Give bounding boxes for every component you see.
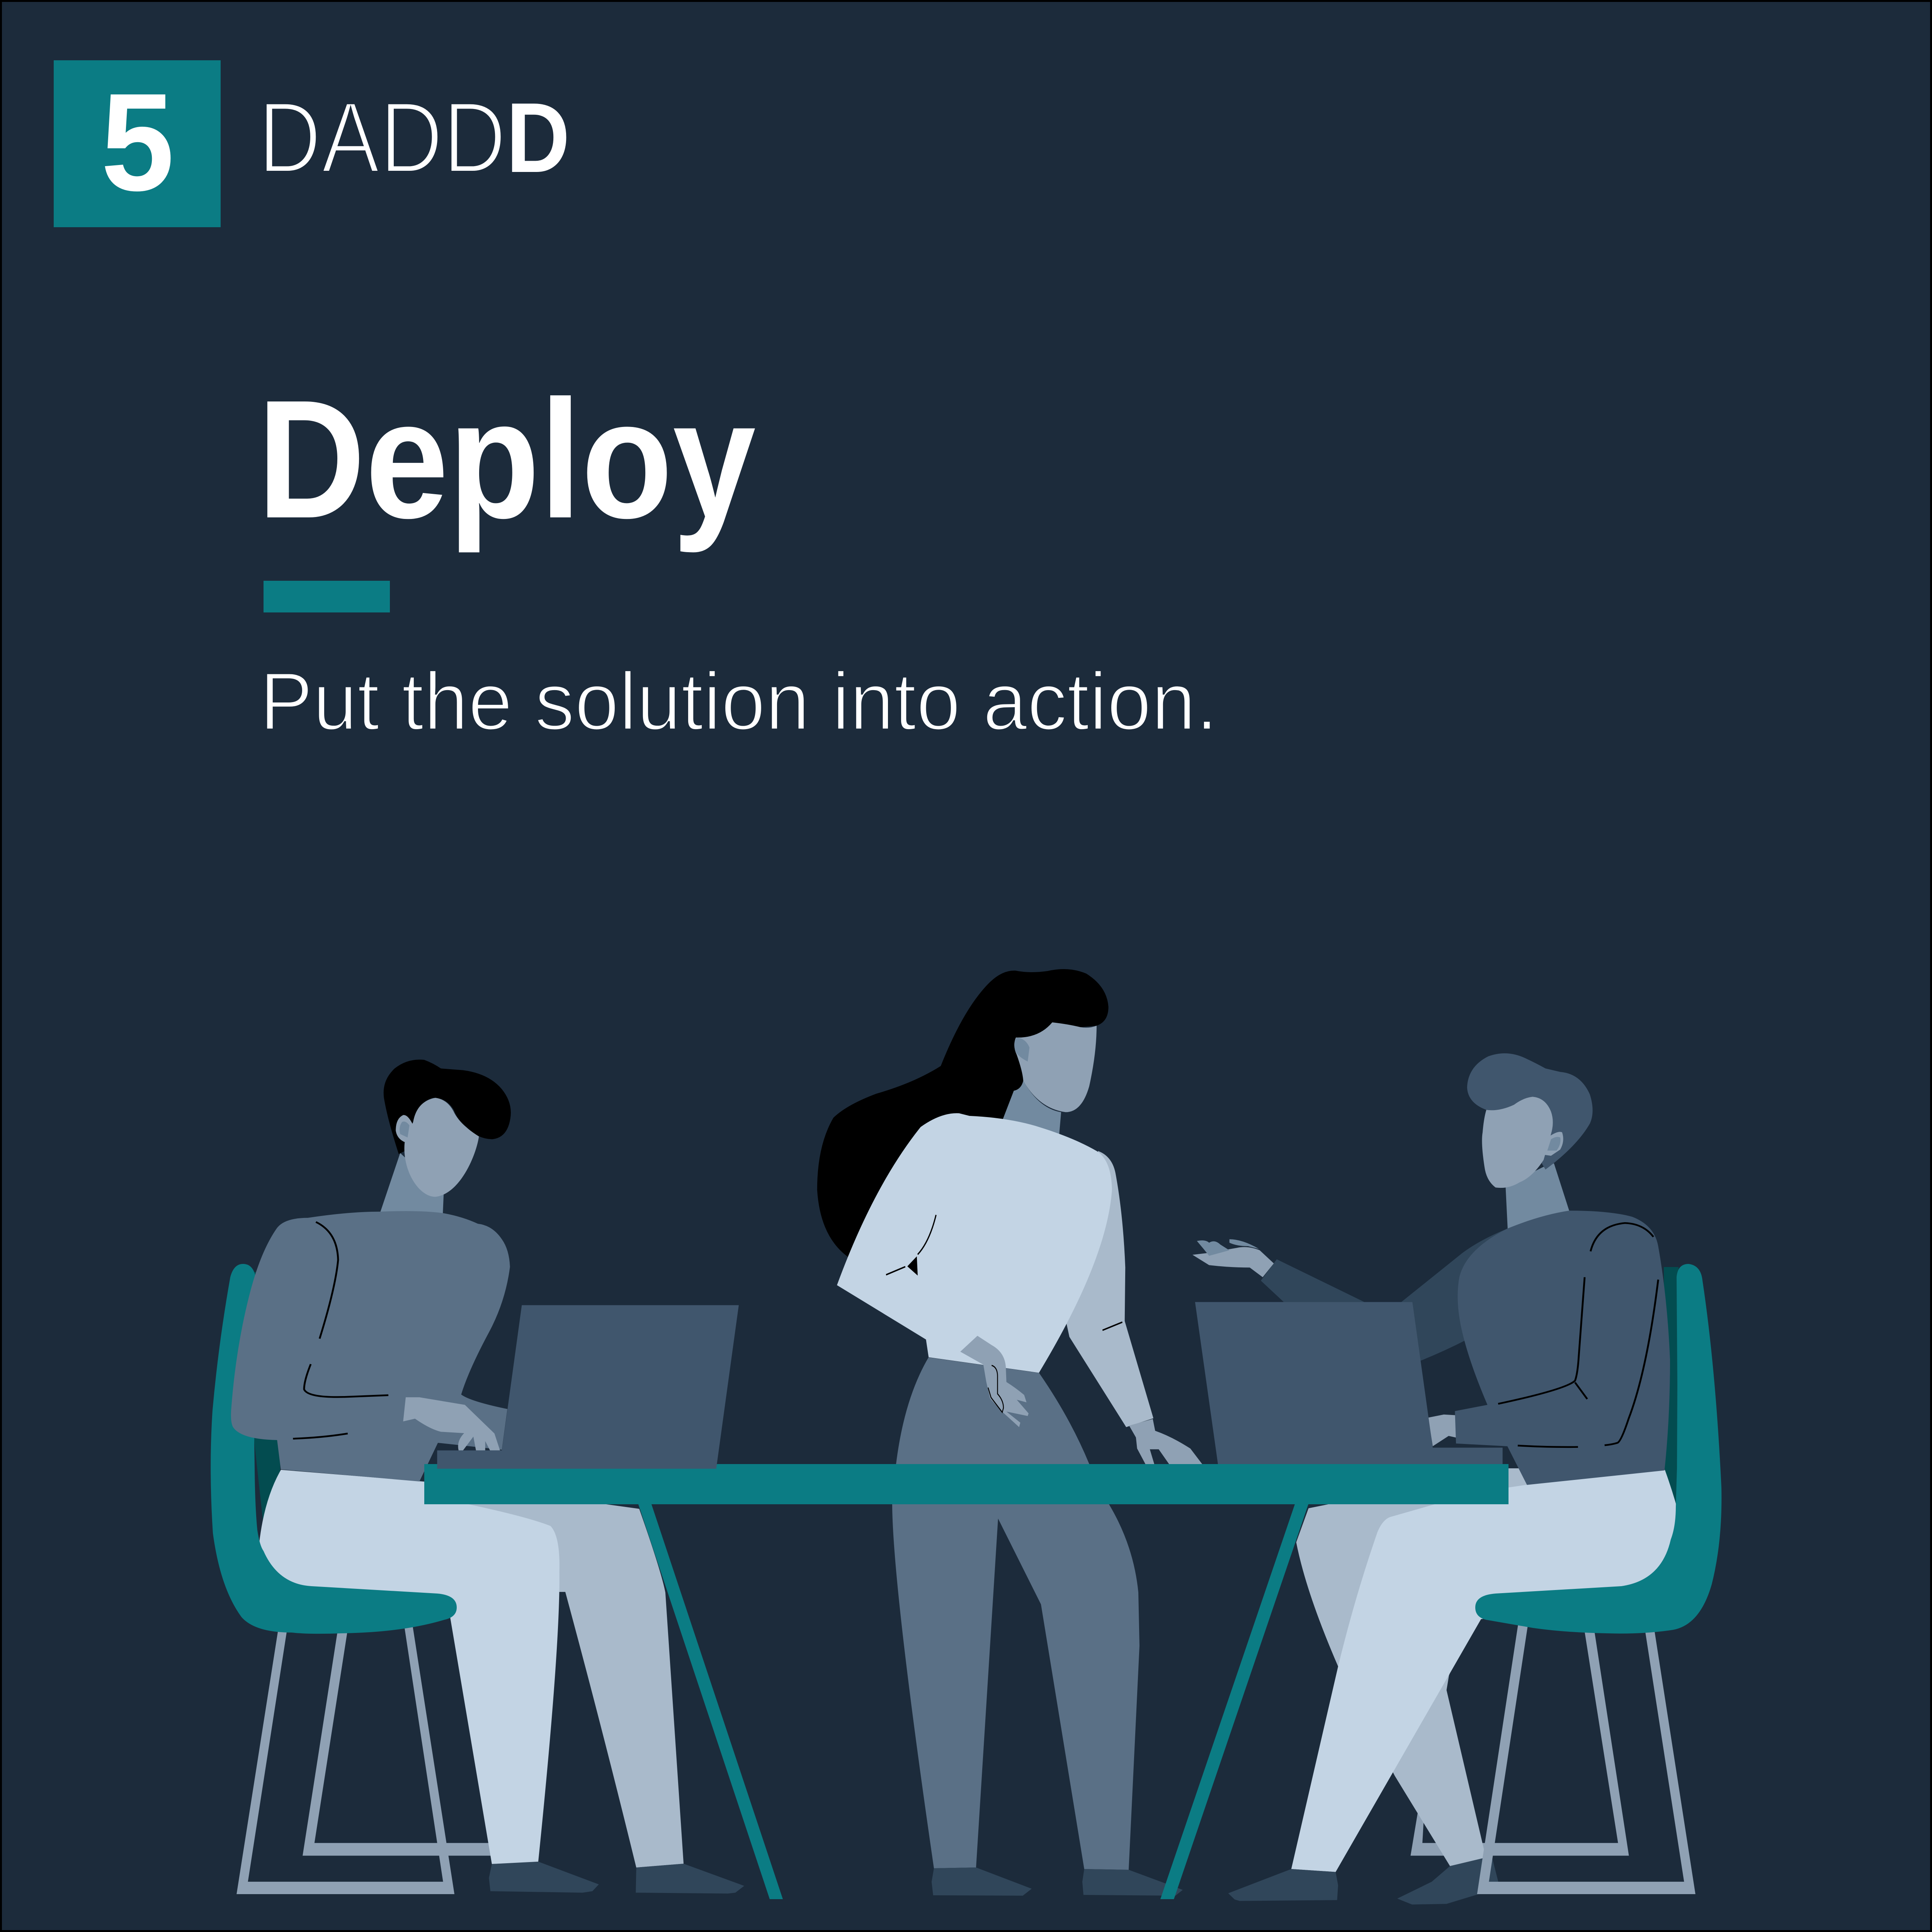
left chair frame [236, 1625, 509, 1894]
ear [396, 1115, 412, 1144]
right person back shoe [1397, 1858, 1498, 1905]
right person: upper body [1192, 1053, 1670, 1485]
hair [1467, 1053, 1593, 1170]
woman standing [817, 969, 1202, 1896]
far hand [1129, 1419, 1202, 1464]
hand on hip [960, 1336, 1029, 1427]
right person back leg [1296, 1468, 1528, 1866]
fingers [1197, 1239, 1259, 1256]
back leg [411, 1481, 684, 1867]
face [404, 1098, 479, 1197]
shirt creases [886, 1215, 1122, 1412]
right chair frame front [1477, 1625, 1696, 1894]
neck [380, 1153, 444, 1217]
accent bar [264, 581, 390, 612]
left chair dark inner back [254, 1272, 280, 1526]
right chair dark inner back [1664, 1267, 1679, 1507]
hair [817, 969, 1109, 1258]
shirt [837, 1113, 1112, 1373]
left person: upper body [231, 1060, 511, 1481]
brand name DADDD: D [506, 82, 570, 193]
right person: front leg [1228, 1470, 1690, 1901]
subtitle: Put the solution into action. [260, 655, 1218, 747]
ear [1014, 1037, 1029, 1061]
neck [1505, 1163, 1570, 1231]
left shoe [932, 1867, 1032, 1896]
front shoe [489, 1862, 599, 1893]
number badge: 5 [101, 65, 174, 220]
left person: legs [257, 1470, 744, 1894]
sleeve lines [293, 1222, 388, 1439]
hair [384, 1060, 511, 1154]
back arm [1261, 1228, 1509, 1361]
back shoe [636, 1864, 744, 1894]
ear [1544, 1132, 1563, 1156]
left laptop [437, 1305, 739, 1469]
front leg [257, 1470, 560, 1864]
torso and arm [1455, 1211, 1670, 1485]
table top [424, 1464, 1509, 1504]
trousers [892, 1357, 1139, 1870]
woman upper body [817, 969, 1202, 1464]
far arm [1066, 1151, 1153, 1427]
hand [403, 1397, 500, 1451]
torso and arm [231, 1211, 510, 1481]
right laptop [1195, 1302, 1503, 1467]
left chair shell [211, 1264, 457, 1634]
number badge [54, 60, 221, 227]
right chair frame back [1296, 1468, 1696, 1905]
neck [1002, 1081, 1061, 1136]
face [1014, 1022, 1097, 1112]
near hand [1428, 1415, 1456, 1446]
title: Deploy [257, 365, 757, 554]
right shoe [1082, 1869, 1183, 1896]
sleeve lines [1498, 1223, 1658, 1447]
open hand [1192, 1247, 1274, 1277]
brand name DADDD: DADD [258, 81, 506, 194]
right chair shell [1475, 1264, 1721, 1634]
front shoe [1228, 1869, 1338, 1901]
face [1482, 1097, 1553, 1188]
table legs [638, 1504, 1308, 1899]
arm gap [907, 1256, 918, 1276]
